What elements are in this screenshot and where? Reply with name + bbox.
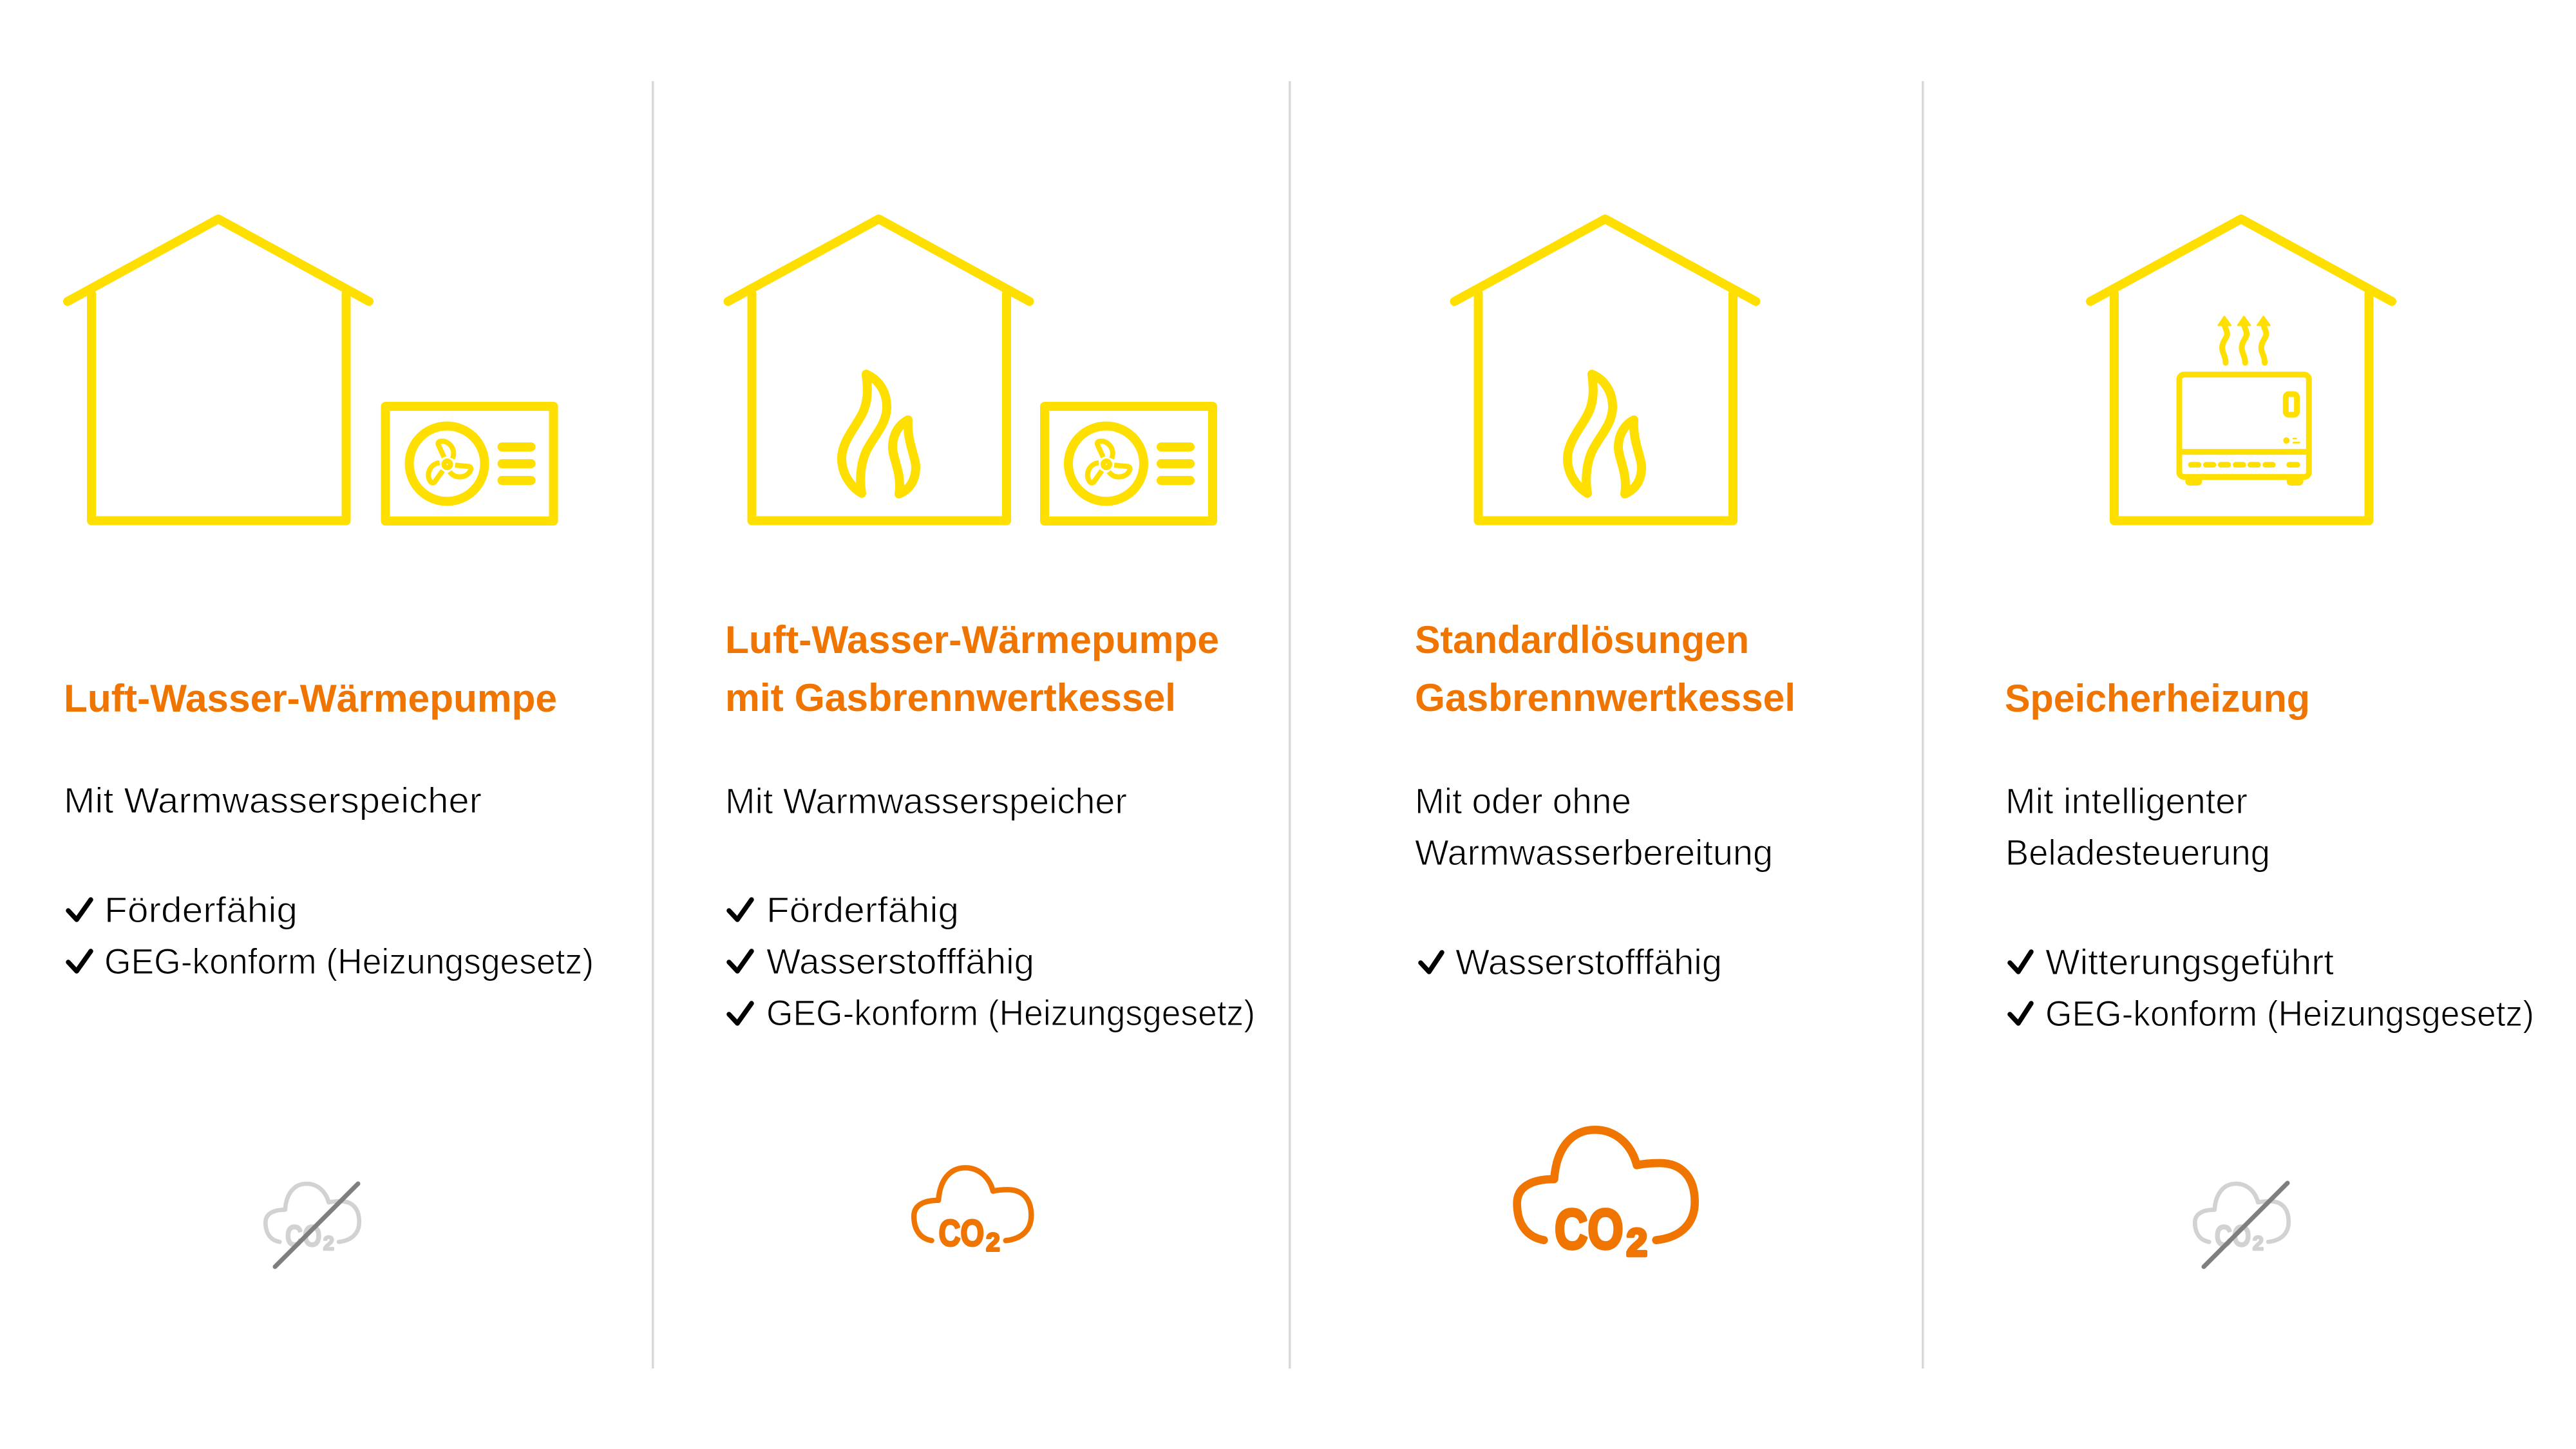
- heading: Luft-Wasser-Wärmepumpe: [725, 618, 1219, 661]
- panel: Speicherheizung: [2005, 219, 2534, 1267]
- heading: mit Gasbrennwertkessel: [725, 676, 1176, 719]
- checklist: GEG-konform (Heizungsgesetz): [2045, 993, 2534, 1034]
- checklist: Witterungsgeführt: [2045, 942, 2334, 982]
- checklist: Wasserstofffähig: [766, 941, 1034, 981]
- checklist: GEG-konform (Heizungsgesetz): [104, 941, 594, 981]
- icon: no CO2: 2: [323, 1231, 334, 1255]
- icon: no CO2: [2195, 1183, 2289, 1267]
- description: Mit Warmwasserspeicher: [725, 781, 1127, 821]
- icon: no CO2: [265, 1184, 359, 1267]
- icon: large CO2 cloud: 2: [1626, 1221, 1647, 1264]
- icon: gas flame: [842, 374, 916, 494]
- icon: small CO2 cloud: CO: [939, 1213, 984, 1255]
- checklist: Förderfähig: [766, 889, 959, 930]
- icon: house: [728, 219, 1029, 520]
- icon: large CO2 cloud: CO: [1555, 1197, 1624, 1260]
- description: [2005, 781, 2270, 873]
- description: Mit oder ohne: [1415, 781, 1631, 821]
- checklist: Förderfähig: [104, 889, 298, 930]
- checklist: Wasserstofffähig: [1455, 942, 1722, 982]
- icon: outdoor heat pump unit: [385, 406, 554, 521]
- description: Mit Warmwasserspeicher: [64, 780, 482, 820]
- heading: Speicherheizung: [2005, 677, 2310, 720]
- panel: Luft-Wasser-Wärmepumpe: [64, 219, 594, 1267]
- icon: gas flame: [1567, 374, 1642, 494]
- icon: outdoor heat pump unit: [1045, 406, 1213, 521]
- heading: [725, 618, 1219, 719]
- icon: small CO2 cloud: 2: [986, 1228, 1000, 1256]
- checklist: [2010, 942, 2534, 1034]
- icon: house: [1454, 219, 1756, 520]
- icon: small CO2 cloud: [914, 1168, 1031, 1256]
- description: [1415, 781, 1773, 873]
- checklist: GEG-konform (Heizungsgesetz): [766, 992, 1255, 1033]
- panel: Standardlösungen Gasbrennwertkessel: [1415, 219, 1795, 1264]
- icon: storage heater: [2179, 317, 2309, 486]
- checklist: [68, 889, 594, 981]
- icon: no CO2: 2: [2253, 1231, 2264, 1255]
- icon: no CO2: CO: [2215, 1219, 2251, 1253]
- heading: Luft-Wasser-Wärmepumpe: [64, 677, 557, 720]
- icon: house: [68, 219, 369, 520]
- description: Warmwasserbereitung: [1415, 832, 1773, 873]
- icon: no CO2: CO: [285, 1219, 321, 1253]
- description: Beladesteuerung: [2005, 832, 2270, 873]
- heading: Standardlösungen: [1415, 618, 1749, 661]
- heading: [1415, 618, 1795, 719]
- description: Mit intelligenter: [2005, 781, 2248, 821]
- heading: Gasbrennwertkessel: [1415, 676, 1795, 719]
- icon: large CO2 cloud: [1517, 1130, 1695, 1264]
- panel: Luft-Wasser-Wärmepumpe mit Gasbrennwertkessel: [725, 219, 1255, 1256]
- icon: house: [2090, 219, 2392, 520]
- checklist: [729, 889, 1255, 1033]
